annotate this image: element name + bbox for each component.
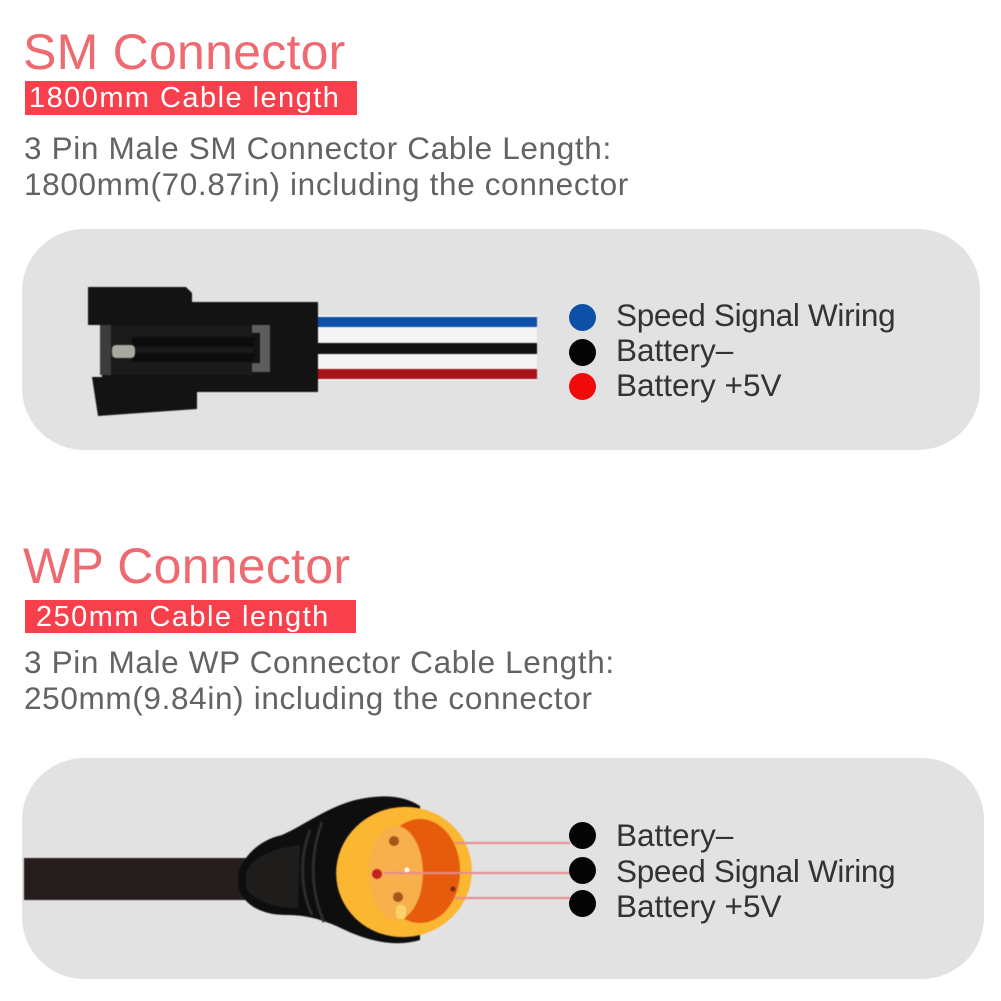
text: SM cable description: 3 Pin Male SM Connector Cable Length: (24, 130, 612, 166)
dot: red (569, 373, 596, 400)
text: WP cable description: 3 Pin Male WP Connector Cable Length: (24, 644, 615, 680)
dot: blue (569, 304, 596, 331)
badge: 250mm cable length: 250mm Cable length (36, 601, 330, 633)
text: WP cable description: 250mm(9.84in) including the connector (24, 680, 593, 716)
label: Battery minus: Battery– (616, 332, 733, 368)
label: Speed Signal Wiring: Speed Signal Wiring (616, 297, 895, 333)
panel: WP connector (22, 758, 984, 979)
image: SM connector with wires (87, 286, 538, 417)
text: SM cable description (24, 130, 629, 202)
text: WP cable description (24, 644, 615, 716)
dot: black (569, 339, 596, 366)
text: SM cable description: 1800mm(70.87in) including the connector (24, 166, 629, 202)
dot: battery minus (569, 822, 596, 849)
legend: WP wires (569, 817, 895, 924)
label: Battery minus: Battery– (616, 817, 733, 853)
legend: SM wire colours (569, 297, 895, 403)
dot: battery +5V (569, 890, 596, 917)
dot: speed signal (569, 857, 596, 884)
panel: SM connector (22, 229, 980, 450)
badge: 1800mm cable length: 1800mm Cable length (29, 82, 340, 114)
label: Battery +5V: Battery +5V (616, 367, 781, 403)
label: Battery +5V: Battery +5V (616, 888, 781, 924)
image: WP round connector with leader lines (23, 796, 570, 944)
heading: WP Connector: WP Connector (23, 538, 350, 594)
heading: SM Connector: SM Connector (23, 24, 346, 80)
label: Speed Signal Wiring: Speed Signal Wiring (616, 853, 895, 889)
